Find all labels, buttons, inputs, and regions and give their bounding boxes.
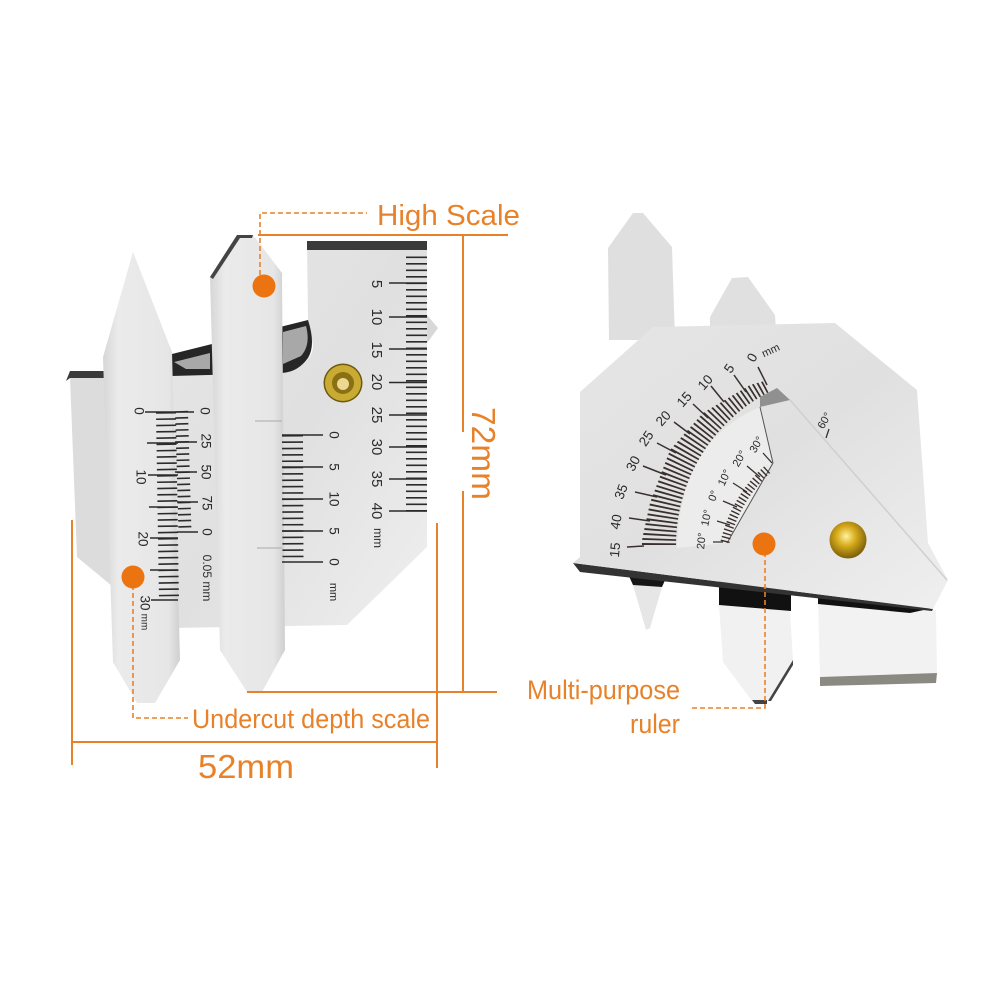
callout: undercut depth scale <box>122 566 430 734</box>
middle ruler numbers: mm <box>327 583 339 601</box>
height ruler numbers: 30 <box>368 439 385 455</box>
middle ruler numbers <box>326 431 341 601</box>
main arc numbers: 30 <box>623 453 643 474</box>
main arc numbers: 0 <box>744 351 761 364</box>
undercut scale numbers: mm <box>138 614 149 630</box>
callout: multi-purpose ruler <box>527 532 776 739</box>
height ruler numbers: 20 <box>368 374 385 390</box>
undercut scale numbers: 0 <box>197 407 212 415</box>
angle arc numbers: 0° <box>706 489 721 503</box>
gold rivet <box>830 522 866 558</box>
height ruler numbers: 35 <box>368 471 385 487</box>
callout: high scale <box>252 200 520 298</box>
main arc numbers: 25 <box>636 428 657 449</box>
main arc numbers: mm <box>760 342 782 360</box>
middle blade dark chamfer <box>210 235 253 279</box>
undercut scale numbers: 30 <box>137 595 152 611</box>
main arc numbers <box>607 342 782 558</box>
undercut scale numbers <box>131 407 214 630</box>
dimension: 52mm width <box>72 520 437 785</box>
angle arc numbers: 10° <box>716 468 734 488</box>
main arc numbers: 20 <box>653 408 674 429</box>
middle blade <box>210 235 285 692</box>
dimension: 72mm height: 72mm <box>465 407 502 500</box>
lower middle blade <box>719 605 793 703</box>
undercut scale numbers: 25 <box>198 433 213 449</box>
undercut scale numbers: 0 <box>131 407 146 415</box>
middle ruler numbers: 10 <box>326 491 341 507</box>
triangle scale lighter area <box>677 407 772 548</box>
angle arc numbers: 10° <box>699 509 715 527</box>
height ruler numbers: 40 <box>368 503 385 519</box>
brass rivet <box>324 364 362 402</box>
dark body edges <box>66 241 427 381</box>
main arc numbers: 15 <box>674 389 695 410</box>
triangle blade ridge <box>760 388 790 407</box>
dark wedge between blades <box>172 320 312 376</box>
angle arc numbers: 60° <box>816 411 834 431</box>
small tip behind body <box>427 315 438 343</box>
triangle right edge <box>790 400 947 580</box>
middle ruler numbers: 5 <box>326 463 341 471</box>
height ruler numbers: 25 <box>368 407 385 423</box>
body left wing <box>70 377 112 586</box>
wedge highlights <box>174 326 308 369</box>
angle arc numbers <box>695 411 834 550</box>
panel: right gauge <box>573 213 948 704</box>
main plate <box>573 323 948 609</box>
callout: high scale: High Scale <box>377 200 520 232</box>
angle arc numbers: 20° <box>731 449 749 469</box>
lower middle blade dark edges <box>752 660 793 704</box>
undercut scale numbers: 0 <box>199 528 214 536</box>
undercut scale numbers: 75 <box>199 495 214 511</box>
height ruler numbers: 5 <box>368 280 385 288</box>
scale: main arc <box>627 367 767 547</box>
lower right blade dark top <box>818 595 933 613</box>
blade faint marks <box>255 421 282 548</box>
panel: left gauge <box>66 235 438 703</box>
undercut scale numbers: 20 <box>135 531 150 547</box>
undercut scale numbers: 10 <box>133 469 148 485</box>
lower middle blade dark top <box>719 580 791 611</box>
main arc numbers: 15 <box>607 542 623 558</box>
scale: middle ruler <box>282 435 323 562</box>
undercut scale numbers: 0.05 mm <box>200 555 214 601</box>
middle ruler numbers: 5 <box>326 527 341 535</box>
top left blade <box>608 213 675 340</box>
undercut scale numbers: 50 <box>198 464 213 480</box>
main arc numbers: 10 <box>695 372 716 393</box>
main arc numbers: 40 <box>607 513 625 531</box>
dark under-edge <box>573 563 933 611</box>
angle arc numbers: 20° <box>695 532 709 550</box>
scale: angle arc <box>713 453 772 542</box>
lower left blade dark top <box>628 574 666 587</box>
gauge body <box>172 241 427 628</box>
middle ruler numbers: 0 <box>326 558 341 566</box>
main arc numbers: 5 <box>721 361 738 376</box>
callout: undercut depth scale: Undercut depth scale <box>192 704 430 734</box>
height ruler numbers: 15 <box>368 342 385 358</box>
scale: height ruler <box>389 256 427 512</box>
main arc numbers: 35 <box>612 482 631 501</box>
height ruler numbers: mm <box>371 528 385 548</box>
dimension: 72mm height <box>247 235 508 692</box>
callout: multi-purpose ruler: Multi-purpose <box>527 675 680 705</box>
height ruler numbers: 10 <box>368 309 385 325</box>
middle ruler numbers: 0 <box>326 431 341 439</box>
angle arc numbers: 30° <box>748 435 766 455</box>
left pointed blade <box>103 252 180 703</box>
scale: undercut depth <box>145 411 198 601</box>
lower right blade <box>818 600 937 677</box>
height ruler numbers <box>368 280 385 548</box>
top centre blade <box>710 277 776 330</box>
lower right blade bottom band <box>820 673 937 686</box>
dimension: 52mm width: 52mm <box>198 748 294 785</box>
lower left blade <box>633 585 662 630</box>
callout: multi-purpose ruler: ruler <box>630 709 680 739</box>
